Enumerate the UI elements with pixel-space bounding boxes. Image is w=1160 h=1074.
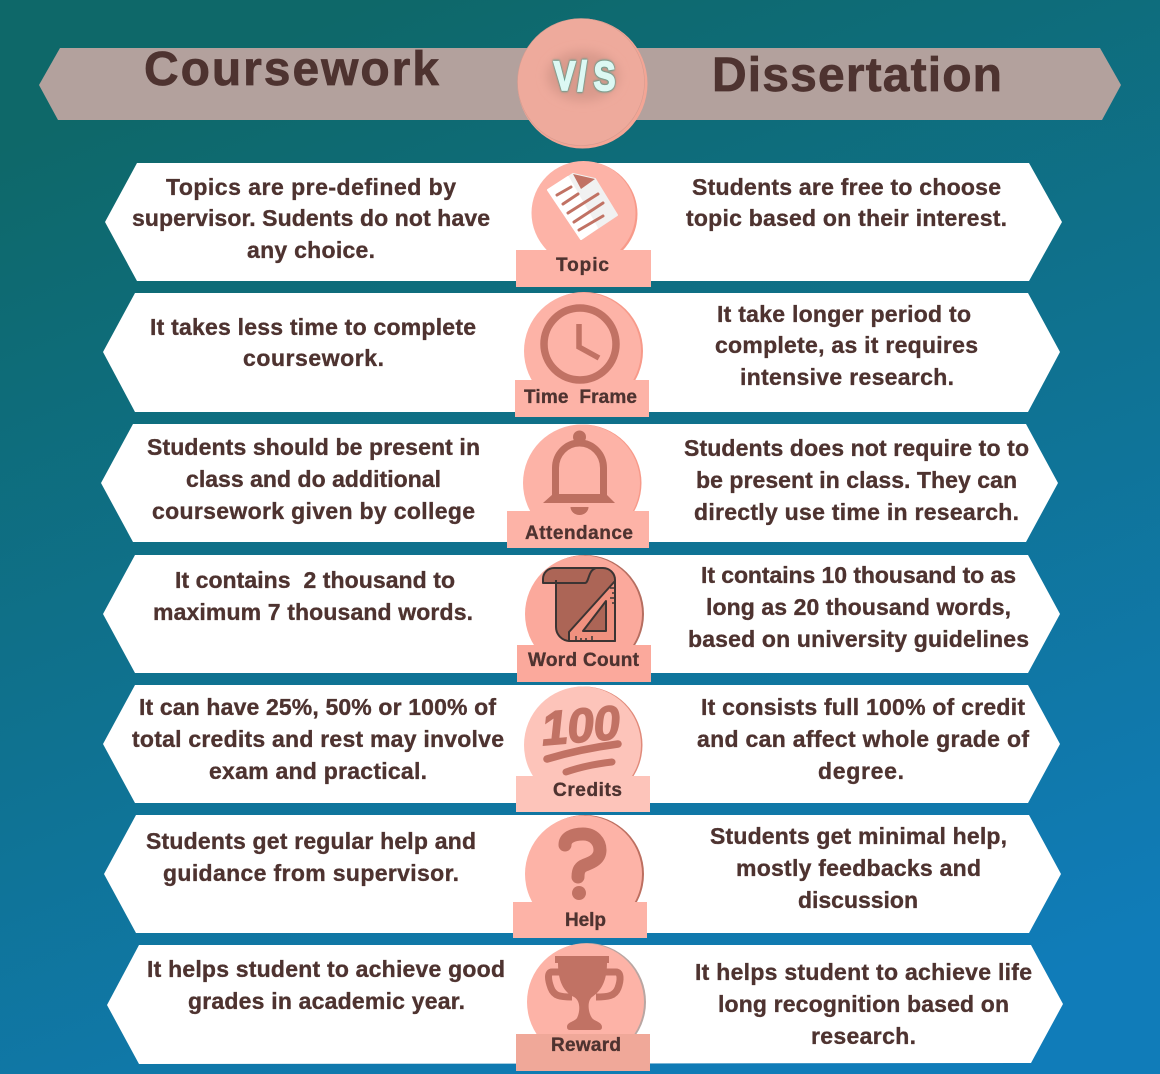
dissertation text [688, 562, 1029, 652]
label: Word Count [517, 645, 651, 682]
coursework text: supervisor. Sudents do not have [132, 205, 490, 231]
dissertation text: long as 20 thousand words, [706, 594, 1011, 620]
dissertation text: complete, as it requires [715, 332, 978, 358]
coursework text: class and do additional [186, 466, 441, 492]
coursework text: coursework given by college [152, 498, 475, 524]
dissertation text [684, 435, 1029, 525]
coursework text [150, 314, 476, 371]
dissertation text: intensive research. [740, 364, 954, 390]
coursework text: It contains 2 thousand to [175, 567, 455, 593]
icon: bell [523, 424, 642, 542]
dissertation text: It take longer period to [717, 301, 971, 327]
heading: Dissertation: Dissertation [712, 49, 1002, 102]
icon: document [532, 161, 638, 266]
dissertation text [715, 301, 978, 390]
ribbon [101, 424, 1058, 542]
coursework text [147, 956, 505, 1014]
icon: 100: 100 [539, 697, 623, 756]
badge circle [524, 292, 643, 410]
coursework text: guidance from supervisor. [163, 860, 459, 886]
coursework text [153, 567, 473, 625]
coursework text: total credits and rest may involve [132, 726, 504, 752]
coursework text: Students should be present in [147, 434, 480, 460]
row: Topic [105, 161, 1062, 287]
label: Help [513, 902, 647, 938]
dissertation text: and can affect whole grade of [697, 726, 1029, 752]
dissertation text: long recognition based on [718, 991, 1009, 1017]
row: Word Count [103, 555, 1060, 682]
dissertation text: be present in class. They can [696, 467, 1017, 493]
dissertation text [710, 823, 1007, 913]
dissertation text: directly use time in research. [694, 499, 1019, 525]
dissertation text: discussion [798, 887, 918, 913]
ribbon [104, 815, 1061, 933]
ribbon [103, 293, 1060, 412]
label: Time Frame: Time Frame [524, 387, 637, 408]
dissertation text: based on university guidelines [688, 626, 1029, 652]
dissertation text: mostly feedbacks and [736, 855, 981, 881]
dissertation text: It contains 10 thousand to as [701, 562, 1016, 588]
coursework text: Students get regular help and [146, 828, 476, 854]
icon: question mark [525, 815, 644, 933]
coursework text [132, 174, 490, 263]
row: Help [104, 815, 1061, 938]
ribbon [103, 685, 1060, 803]
coursework text: It can have 25%, 50% or 100% of [139, 694, 496, 720]
coursework text: It takes less time to complete [150, 314, 476, 340]
dissertation text [697, 694, 1029, 784]
label: Topic [516, 250, 651, 287]
label: Reward: Reward [551, 1035, 621, 1056]
coursework text [147, 434, 480, 524]
label: Help: Help [565, 910, 606, 931]
label: Reward [516, 1034, 650, 1071]
dissertation text [695, 959, 1032, 1049]
dissertation text: It consists full 100% of credit [701, 694, 1025, 720]
icon: scroll and set square [525, 555, 644, 673]
coursework text: grades in academic year. [188, 988, 465, 1014]
row: Credits [103, 685, 1060, 812]
coursework text [146, 828, 476, 886]
coursework text [132, 694, 504, 784]
row: Reward [107, 943, 1063, 1071]
icon: trophy [527, 943, 646, 1061]
coursework text: coursework. [243, 345, 384, 371]
label: Time Frame [515, 380, 649, 417]
label: Credits: Credits [553, 780, 622, 801]
icon: 100 [524, 686, 642, 804]
coursework text: Topics are pre-defined by [166, 174, 456, 200]
dissertation text: research. [811, 1023, 916, 1049]
label: Word Count: Word Count [528, 650, 640, 671]
label: Attendance: Attendance [525, 523, 633, 544]
row: Time Frame [103, 292, 1060, 417]
heading: Coursework: Coursework [144, 43, 439, 96]
label: Attendance [507, 507, 649, 548]
ribbon [103, 555, 1060, 673]
row: Attendance [101, 424, 1058, 548]
ribbon [105, 163, 1062, 281]
dissertation text: Students are free to choose [692, 174, 1001, 200]
dissertation text: degree. [818, 758, 904, 784]
icon: clock [544, 308, 616, 380]
coursework text: It helps student to achieve good [147, 956, 505, 982]
dissertation text: It helps student to achieve life [695, 959, 1032, 985]
versus badge: V/S [554, 52, 615, 99]
versus badge [518, 18, 648, 148]
coursework text: any choice. [247, 237, 375, 263]
label: Credits [516, 776, 650, 812]
dissertation text: Students does not require to to [684, 435, 1029, 461]
label: Topic: Topic [556, 255, 609, 276]
coursework text: exam and practical. [209, 758, 427, 784]
dissertation text [686, 174, 1007, 231]
ribbon [107, 945, 1063, 1064]
dissertation text: topic based on their interest. [686, 205, 1007, 231]
header banner [39, 43, 1121, 120]
dissertation text: Students get minimal help, [710, 823, 1007, 849]
coursework text: maximum 7 thousand words. [153, 599, 473, 625]
